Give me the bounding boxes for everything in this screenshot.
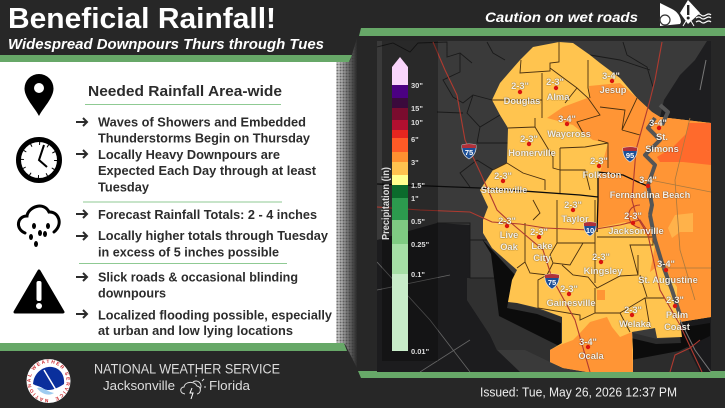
city rainfall labels: 3-4" bbox=[639, 175, 657, 185]
legend tick labels: 0.25" bbox=[411, 240, 430, 249]
city rainfall labels: 2-3" bbox=[546, 77, 564, 87]
interstate shields: 75 bbox=[465, 148, 473, 157]
legend tick labels: 3" bbox=[411, 158, 419, 167]
rainfall 4-6 patch bbox=[657, 123, 711, 165]
yellow patches bbox=[668, 213, 693, 238]
heading: needed rainfall: Needed Rainfall Area-wide bbox=[88, 83, 282, 100]
city rainfall labels: 3-4" bbox=[649, 118, 667, 128]
city rainfall labels: Statenville bbox=[481, 185, 527, 195]
city rainfall labels: Taylor bbox=[561, 214, 589, 224]
interstate shields: 10 bbox=[586, 226, 594, 235]
text block: hazards: Slick roads & occasional blinding bbox=[98, 270, 298, 285]
city rainfall labels: 2-3" bbox=[564, 200, 582, 210]
interstate shields bbox=[462, 144, 637, 289]
icon: storm cloud and sun bbox=[181, 375, 206, 399]
city rainfall labels: Gainesville bbox=[546, 298, 596, 308]
city rainfall labels: 2-3" bbox=[666, 295, 684, 305]
county lines on rain area bbox=[492, 42, 665, 332]
city rainfall labels: Douglas bbox=[504, 96, 540, 106]
city rainfall labels: 2-3" bbox=[590, 156, 608, 166]
text block: timing: Waves of Showers and Embedded bbox=[98, 115, 306, 130]
icon: map pin bbox=[24, 74, 54, 116]
city rainfall labels: Alma bbox=[547, 92, 570, 102]
legend color bar bbox=[392, 57, 408, 351]
rainfall 3-4 area Ocala bbox=[550, 317, 633, 372]
city rainfall labels: 2-3" bbox=[560, 284, 578, 294]
city rainfall labels: 2-3" bbox=[498, 216, 516, 226]
city rainfall labels: Waycross bbox=[547, 129, 591, 139]
state border bbox=[377, 172, 650, 232]
dark southwest land bbox=[377, 223, 520, 372]
city rainfall labels: Ocala bbox=[578, 351, 604, 361]
city rainfall labels: 2-3" bbox=[511, 81, 529, 91]
interstate shields: 75 bbox=[548, 278, 556, 287]
map bbox=[377, 41, 711, 372]
text block: totals: Locally higher totals through Tuesday bbox=[98, 228, 329, 243]
city rainfall labels: 2-3" bbox=[494, 171, 512, 181]
legend tick labels: 6" bbox=[411, 135, 419, 144]
caution heading: Caution on wet roads bbox=[485, 9, 638, 25]
city rainfall labels: 2-3" bbox=[624, 211, 642, 221]
legend tick labels: 30" bbox=[411, 81, 423, 90]
city rainfall labels: Fernandina Beach bbox=[610, 190, 691, 200]
city rainfall labels: Kingsley bbox=[584, 266, 623, 276]
city rainfall labels: St. bbox=[656, 132, 668, 142]
city rainfall labels: Simons bbox=[645, 144, 679, 154]
text block: totals: in excess of 5 inches possible bbox=[98, 245, 279, 260]
icon: rain cloud bbox=[18, 206, 59, 247]
city rainfall labels: Jacksonville bbox=[608, 226, 664, 236]
city rainfall labels: 2-3" bbox=[592, 252, 610, 262]
issued timestamp: Issued: Tue, May 26, 2026 12:37 PM bbox=[480, 386, 677, 400]
city rainfall labels: Folkston bbox=[583, 170, 622, 180]
city rainfall labels bbox=[481, 71, 698, 361]
text block: hazards: downpours bbox=[98, 286, 166, 301]
legend tick labels: 1.5" bbox=[411, 181, 425, 190]
text block: totals: Forecast Rainfall Totals: 2 - 4 inches bbox=[98, 207, 317, 222]
legend title: Precipitation (in) bbox=[381, 167, 392, 240]
text block: timing: Expected Each Day through at least bbox=[98, 163, 317, 178]
arrows bbox=[76, 118, 87, 318]
city rainfall labels: 3-4" bbox=[579, 337, 597, 347]
footer office Florida: Florida bbox=[209, 378, 251, 393]
city rainfall labels: 2-3" bbox=[530, 227, 548, 237]
footer green bar right bbox=[358, 371, 725, 378]
footer agency name: NATIONAL WEATHER SERVICE bbox=[94, 361, 280, 376]
city rainfall labels: 3-4" bbox=[602, 71, 620, 81]
footer green bar left bbox=[0, 343, 347, 351]
coastline bbox=[645, 105, 680, 315]
city rainfall labels: 2-3" bbox=[520, 134, 538, 144]
header green bar left bbox=[0, 55, 352, 62]
city markers bbox=[501, 79, 677, 349]
city rainfall labels: St. Augustine bbox=[638, 275, 698, 285]
legend tick labels: 0.1" bbox=[411, 270, 425, 279]
text block: totals bbox=[98, 207, 329, 260]
city rainfall labels: City bbox=[533, 253, 552, 263]
text block: hazards: Localized flooding possible, especially bbox=[98, 307, 333, 322]
city rainfall labels: Lake bbox=[531, 241, 553, 251]
legend tick labels: 0.5" bbox=[411, 217, 425, 226]
NWS logo: NATIONAL WEATHER SERVICE bbox=[27, 360, 70, 402]
text block: timing: Tuesday bbox=[98, 180, 150, 195]
rainfall 3-4 area east bbox=[547, 83, 711, 322]
halftone edge strip bbox=[336, 38, 357, 368]
city rainfall labels: Welaka bbox=[619, 319, 652, 329]
legend backdrop bbox=[382, 41, 438, 361]
city rainfall labels: 3-4" bbox=[657, 259, 675, 269]
shadow under rainfall area bbox=[482, 239, 710, 366]
legend tick labels bbox=[411, 81, 430, 356]
text block: hazards bbox=[98, 270, 333, 338]
city rainfall labels: Coast bbox=[664, 322, 690, 332]
text block: timing bbox=[98, 115, 317, 195]
city rainfall labels: 3-4" bbox=[558, 114, 576, 124]
text block: timing: Locally Heavy Downpours are bbox=[98, 147, 280, 162]
header green bar right bbox=[359, 28, 725, 36]
county block southwest bbox=[467, 278, 562, 362]
text block: timing: Thunderstorms Begin on Thursday bbox=[98, 131, 311, 146]
title: Beneficial Rainfall! bbox=[8, 3, 276, 35]
city rainfall labels: Palm bbox=[666, 310, 688, 320]
legend tick labels: 0.01" bbox=[411, 347, 430, 356]
ocean bbox=[660, 41, 711, 123]
legend tick labels: 10" bbox=[411, 118, 423, 127]
city rainfall labels: Homerville bbox=[508, 148, 556, 158]
city rainfall labels: 2-3" bbox=[624, 305, 642, 315]
rainfall 2-3 area bbox=[480, 42, 711, 372]
legend tick labels: 1" bbox=[411, 194, 419, 203]
icon: warning triangle bbox=[15, 271, 63, 312]
roads bbox=[377, 42, 702, 372]
county lines on dark land bbox=[377, 42, 653, 278]
panel: white text panel bbox=[0, 61, 336, 344]
icon: clock bbox=[18, 140, 60, 180]
interstate shields: 95 bbox=[626, 151, 634, 160]
city rainfall labels: Oak bbox=[500, 242, 519, 252]
icon: car, warning sign and water bbox=[660, 0, 711, 26]
small orange patch bbox=[597, 290, 605, 300]
city rainfall labels: Live bbox=[500, 230, 518, 240]
legend tick labels: 15" bbox=[411, 104, 423, 113]
footer office Jacksonville: Jacksonville bbox=[103, 378, 175, 393]
text block: hazards: at urban and low lying locations bbox=[98, 323, 293, 338]
city rainfall labels: Jesup bbox=[600, 85, 627, 95]
light county lines southwest bbox=[377, 262, 470, 372]
subtitle: Widespread Downpours Thurs through Tues bbox=[8, 37, 324, 53]
